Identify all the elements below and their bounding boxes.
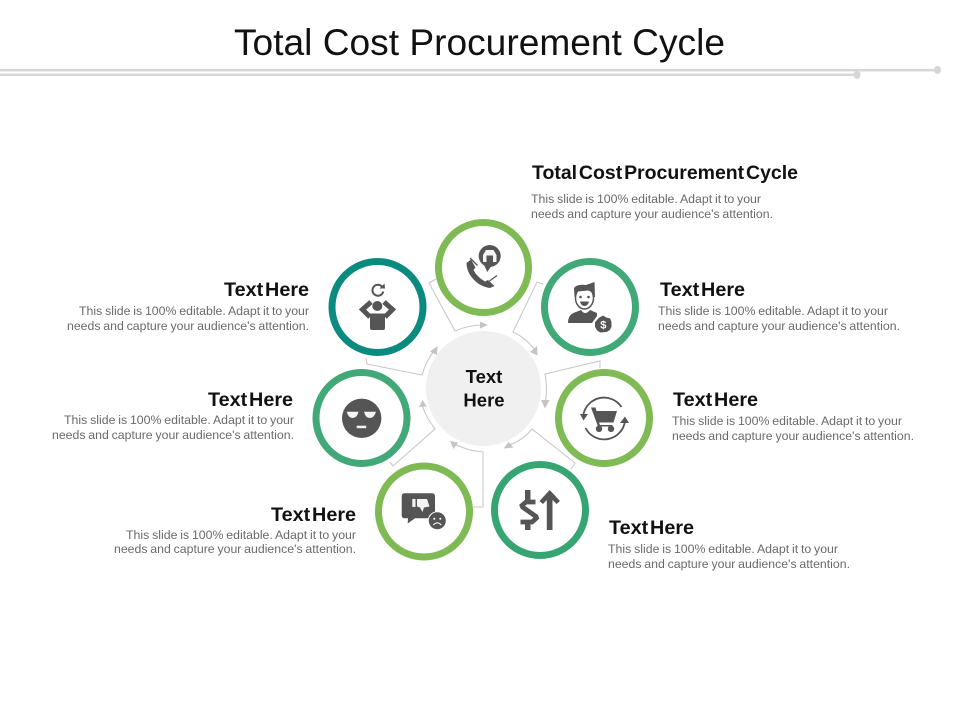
text block: left: Text Here: [208, 390, 293, 411]
text block: lower left: Text Here: [271, 505, 356, 526]
text block: lower left: [114, 505, 356, 556]
text block: right: needs and capture your audience's attention.: [672, 429, 914, 443]
step circle: lower right: [494, 464, 586, 556]
text block: upper left: Text Here: [224, 280, 309, 301]
step circle: upper right: [544, 262, 636, 352]
text block: left: This slide is 100% editable. Adapt it to your: [64, 413, 294, 427]
text block: lower right: Text Here: [609, 518, 694, 539]
text block: upper right: This slide is 100% editable. Adapt it to your: [658, 304, 888, 318]
text block: top heading: This slide is 100% editable. Adapt it to your: [531, 192, 761, 206]
icon: thumbs down speech bubble with sad face: [402, 493, 446, 530]
text block: lower right: This slide is 100% editable. Adapt it to your: [608, 542, 838, 556]
text block: upper left: [67, 280, 309, 333]
step circle: upper left: [332, 262, 423, 352]
text block: lower right: [608, 518, 850, 571]
text block: left: [52, 390, 294, 442]
text block: lower left: This slide is 100% editable. Adapt it to your: [126, 528, 356, 542]
icon: frustrated person with refresh arrow: [362, 284, 392, 330]
icon: man with dollar badge: $: [600, 320, 606, 332]
centre circle: [426, 331, 541, 446]
icon: dollar and up arrow: [520, 490, 560, 530]
text block: lower left: needs and capture your audience's attention.: [114, 542, 356, 556]
text block: upper right: [658, 280, 900, 333]
title underline with end dots: [0, 66, 941, 79]
text block: right: [672, 390, 914, 443]
text block: top heading: needs and capture your audience's attention.: [531, 207, 773, 221]
step circle: right: [558, 372, 650, 464]
centre circle: Here: [463, 390, 505, 410]
text block: top heading: [531, 163, 798, 221]
text block: right: This slide is 100% editable. Adapt it to your: [672, 414, 902, 428]
centre circle: Text: [466, 366, 502, 387]
text block: right: Text Here: [673, 390, 758, 411]
text block: upper left: This slide is 100% editable. Adapt it to your: [79, 304, 309, 318]
step circle: top: [438, 222, 528, 312]
title: Total Cost Procurement Cycle: [234, 22, 725, 63]
text block: left: needs and capture your audience's attention.: [52, 428, 294, 442]
step circle: lower left: [378, 466, 470, 557]
text block: upper left: needs and capture your audience's attention.: [67, 319, 309, 333]
icon: phone with store bubble: [466, 245, 501, 288]
text block: upper right: Text Here: [660, 280, 745, 301]
icon: annoyed face: [342, 399, 381, 438]
text block: lower right: needs and capture your audience's attention.: [608, 557, 850, 571]
connector arrows: [366, 279, 600, 507]
text block: upper right: needs and capture your audience's attention.: [658, 319, 900, 333]
icon: shopping cart in cycle arrows: [580, 398, 629, 439]
text block: top heading: Total Cost Procurement Cycle: [532, 163, 798, 184]
step circle: left: [316, 372, 407, 464]
